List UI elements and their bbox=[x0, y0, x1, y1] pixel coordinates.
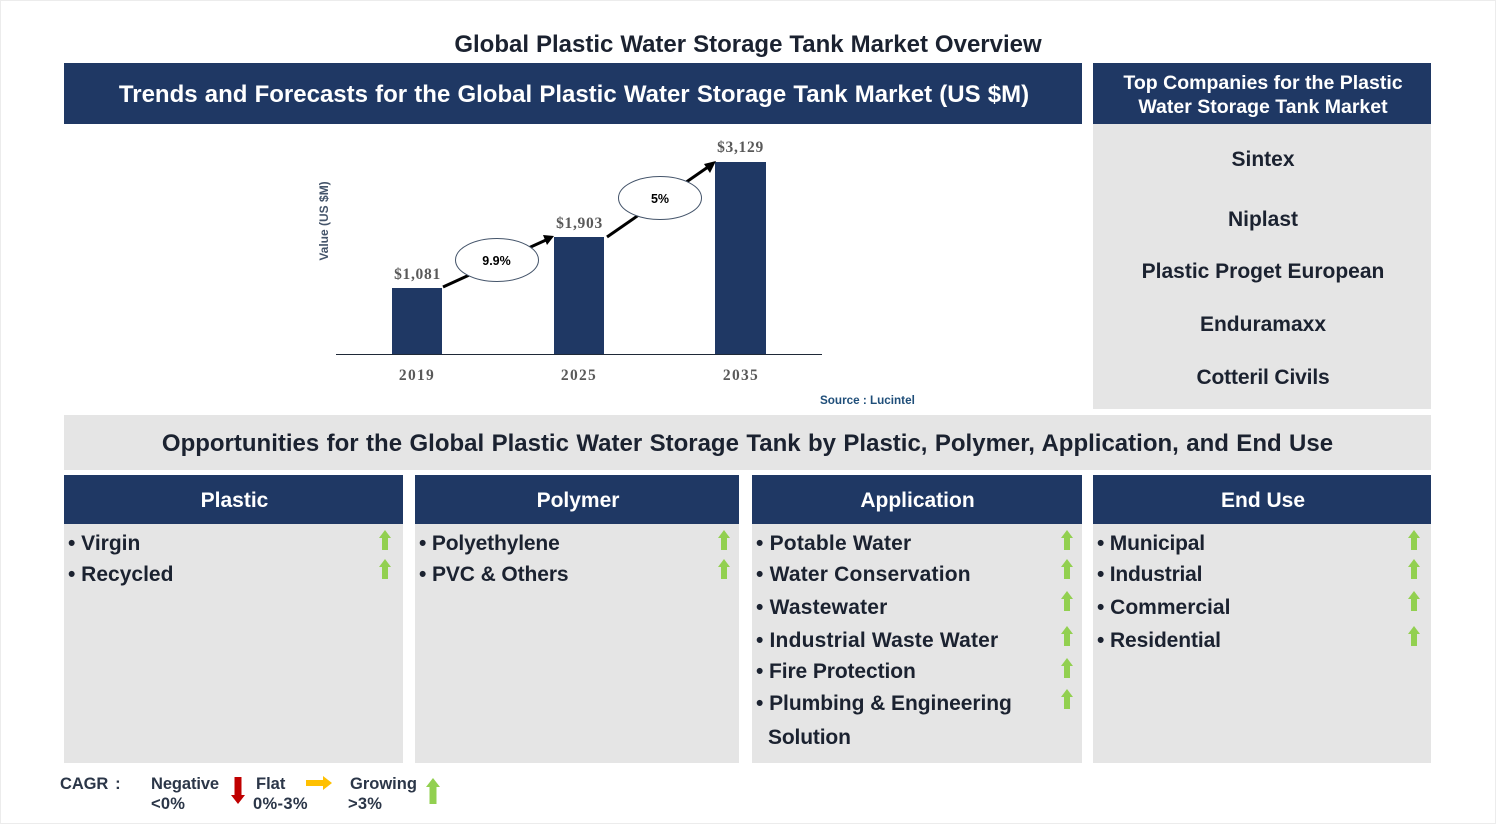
icon: red down arrow bbox=[231, 777, 245, 804]
polymer heading: Polymer bbox=[537, 488, 619, 512]
growth arrow 2025 to 2035 bbox=[607, 161, 716, 237]
legend flat: Flat bbox=[256, 775, 285, 793]
CAGR ellipse 9.9%: 9.9% bbox=[482, 254, 511, 268]
source note: Source : Lucintel bbox=[820, 394, 915, 407]
end use heading bbox=[1093, 475, 1431, 524]
icon: yellow right arrow bbox=[306, 776, 332, 790]
CAGR ellipse 5% bbox=[618, 176, 702, 220]
year labels bbox=[399, 367, 759, 384]
opportunities heading: Opportunities for the Global Plastic Water Storage Tank by Plastic, Polymer, Application, and End Use bbox=[162, 430, 1333, 456]
legend: CAGR: 0%-3% bbox=[253, 795, 308, 813]
panel heading: trends and forecasts bbox=[64, 63, 1082, 124]
year labels: 2019 bbox=[399, 367, 435, 384]
value labels: $1,081 bbox=[394, 266, 441, 283]
plastic heading: Plastic bbox=[201, 488, 268, 512]
application items: • Industrial Waste Water bbox=[756, 629, 998, 652]
bars bbox=[392, 162, 766, 354]
panel: plastic bbox=[64, 475, 403, 763]
legend: CAGR bbox=[60, 775, 440, 813]
legend label: CAGR : bbox=[60, 775, 121, 793]
polymer items: • Polyethylene bbox=[419, 532, 560, 555]
legend growing: Growing bbox=[350, 775, 417, 793]
application heading: Application bbox=[860, 488, 975, 512]
value labels bbox=[394, 139, 764, 283]
end use items: • Municipal bbox=[1097, 532, 1205, 555]
company: Sintex: Sintex bbox=[1231, 148, 1295, 171]
panel heading: trends and forecasts: Trends and Forecasts for the Global Plastic Water Storage Tank Market (US $M) bbox=[119, 80, 1029, 108]
company: Enduramaxx: Enduramaxx bbox=[1200, 313, 1326, 336]
icon: green up arrow bbox=[426, 778, 440, 804]
polymer items bbox=[419, 532, 568, 586]
companies list bbox=[1093, 124, 1431, 409]
legend negative: Negative bbox=[151, 775, 219, 793]
companies heading bbox=[1093, 63, 1431, 124]
growth arrow 2019 to 2025 bbox=[443, 235, 554, 287]
end use items: • Commercial bbox=[1097, 596, 1230, 619]
year labels: 2025 bbox=[561, 367, 597, 384]
y axis title: Value (US $M) bbox=[317, 181, 331, 261]
CAGR ellipse 5%: 5% bbox=[651, 192, 669, 206]
panel: application bbox=[752, 475, 1082, 763]
application items: • Potable Water bbox=[756, 532, 911, 555]
plastic items: • Recycled bbox=[68, 563, 173, 586]
legend: CAGR: <0% bbox=[151, 795, 185, 813]
company: Niplast: Niplast bbox=[1228, 208, 1298, 231]
plastic items bbox=[68, 532, 173, 586]
end use items: • Industrial bbox=[1097, 563, 1202, 586]
application items bbox=[756, 532, 1012, 749]
companies heading: Water Storage Tank Market bbox=[1138, 96, 1388, 118]
companies heading: Top Companies for the Plastic bbox=[1123, 72, 1403, 94]
end use items: • Residential bbox=[1097, 629, 1221, 652]
title: Global Plastic Water Storage Tank Market Overview bbox=[454, 31, 1042, 58]
application items: • Wastewater bbox=[756, 596, 888, 619]
panel: polymer bbox=[415, 475, 739, 763]
company: Cotteril Civils: Cotteril Civils bbox=[1196, 366, 1330, 389]
polymer heading bbox=[415, 475, 739, 524]
end use heading: End Use bbox=[1221, 488, 1305, 512]
panel: end use bbox=[1093, 475, 1431, 763]
plastic heading bbox=[64, 475, 403, 524]
panel: top companies bbox=[1093, 63, 1431, 409]
application heading bbox=[752, 475, 1082, 524]
application items: • Water Conservation bbox=[756, 563, 971, 586]
value labels: $1,903 bbox=[556, 215, 603, 232]
legend: CAGR: >3% bbox=[348, 795, 382, 813]
polymer items: • PVC & Others bbox=[419, 563, 568, 586]
CAGR ellipse 9.9% bbox=[456, 238, 538, 282]
company: Plastic Proget European: Plastic Proget European bbox=[1142, 260, 1384, 283]
application items: • Fire Protection bbox=[756, 660, 916, 683]
application items: Solution bbox=[768, 726, 851, 749]
value labels: $3,129 bbox=[717, 139, 764, 156]
opportunities heading bbox=[64, 415, 1431, 470]
plastic items: • Virgin bbox=[68, 532, 140, 555]
end use items bbox=[1097, 532, 1230, 652]
application items: • Plumbing & Engineering bbox=[756, 692, 1012, 715]
year labels: 2035 bbox=[723, 367, 759, 384]
